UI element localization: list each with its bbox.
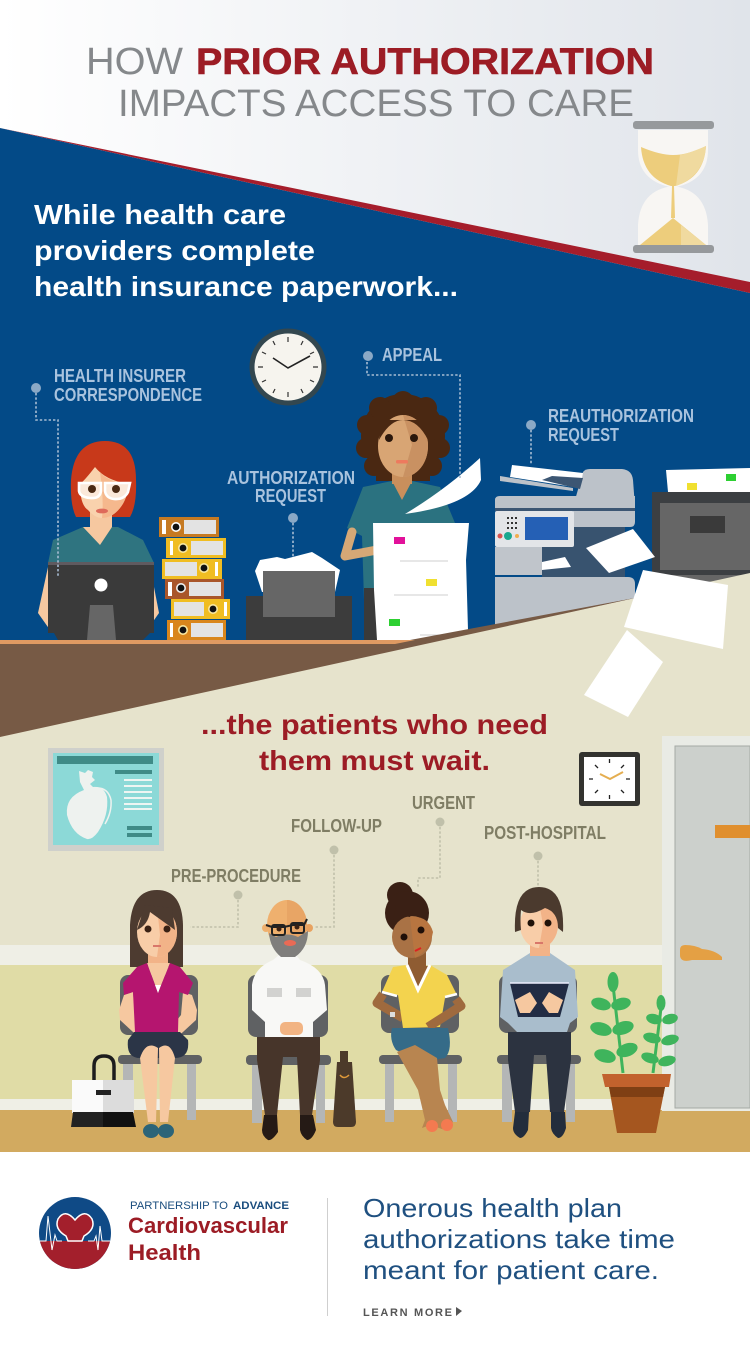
heading: providers: providers complete (34, 235, 315, 266)
floor (0, 1110, 750, 1152)
icon: hourglass (633, 121, 714, 253)
tagline: meant for patient care. (363, 1255, 659, 1285)
dotted connector lines (36, 362, 538, 927)
label: health insurer correspondence: HEALTH INSURER (54, 366, 186, 386)
wall lower section, rail, baseboard (0, 945, 750, 1111)
tagline (363, 1193, 675, 1285)
filing cabinet with papers (652, 468, 750, 595)
label: authorization request: AUTHORIZATION (227, 468, 355, 488)
stack of binders (159, 517, 230, 640)
door (662, 736, 750, 1111)
chairs (118, 975, 581, 1123)
logo mark (39, 1197, 111, 1271)
waiting room labels: PRE-PROCEDURE (171, 866, 301, 886)
panel: blue office background (0, 128, 750, 740)
person: woman in magenta top (119, 890, 197, 1138)
label: authorization request: REQUEST (255, 486, 326, 506)
waiting room labels (171, 793, 606, 900)
person: bald man with beard (252, 900, 327, 1140)
tagline: authorizations take time (363, 1224, 675, 1254)
waiting room labels: POST-HOSPITAL (484, 823, 606, 843)
flying paper (405, 458, 481, 514)
person: woman with curly hair holding paper stack (345, 391, 469, 640)
person: woman with red hair at monitor (38, 441, 159, 640)
footer divider (327, 1198, 328, 1316)
person: man reading book (500, 887, 578, 1138)
label: health insurer correspondence (31, 366, 202, 405)
papers falling (584, 529, 728, 717)
waiting room labels: FOLLOW-UP (291, 816, 382, 836)
in-tray with papers (246, 552, 352, 640)
label: reauthorization request (526, 406, 694, 445)
icon: briefcase (333, 1051, 356, 1127)
heading: providers: health insurance paperwork... (34, 271, 458, 302)
heading: patients (201, 709, 548, 776)
label: reauthorization request: REQUEST (548, 425, 619, 445)
logo wordmark: PARTNERSHIP TO (130, 1200, 228, 1212)
heading: patients: ...the patients who need (201, 709, 548, 740)
title (86, 41, 654, 125)
label: appeal (363, 345, 442, 365)
panel: footer (0, 1152, 750, 1368)
title: IMPACTS ACCESS TO CARE (118, 83, 634, 125)
logo wordmark: ADVANCE (233, 1200, 289, 1212)
copier machine (495, 465, 635, 630)
icon: office clock (250, 328, 326, 406)
label: appeal: APPEAL (382, 345, 442, 365)
label: health insurer correspondence: CORRESPONDENCE (54, 385, 202, 405)
panel: top header background (0, 0, 750, 300)
x-ray panel (48, 748, 164, 851)
icon: handbag (71, 1056, 136, 1127)
heading: patients: them must wait. (259, 745, 490, 776)
wall clock (579, 752, 640, 806)
label: authorization request (227, 468, 355, 523)
desk (0, 597, 640, 740)
logo wordmark: Health (128, 1240, 201, 1265)
tagline: Onerous health plan (363, 1193, 622, 1223)
heading: providers (34, 199, 458, 302)
potted plant (589, 972, 680, 1133)
red diagonal stripe (0, 128, 750, 293)
heading: providers: While health care (34, 199, 286, 230)
panel: waiting room wall (0, 573, 750, 1152)
learn more link: LEARN MORE (363, 1307, 452, 1319)
waiting room labels: URGENT (412, 793, 475, 813)
logo wordmark: Cardiovascular (128, 1213, 288, 1238)
title: PRIOR AUTHORIZATION (196, 41, 654, 82)
label: reauthorization request: REAUTHORIZATION (548, 406, 694, 426)
title: HOW (86, 41, 183, 83)
person: woman in yellow top (377, 882, 461, 1132)
logo wordmark (128, 1200, 289, 1265)
